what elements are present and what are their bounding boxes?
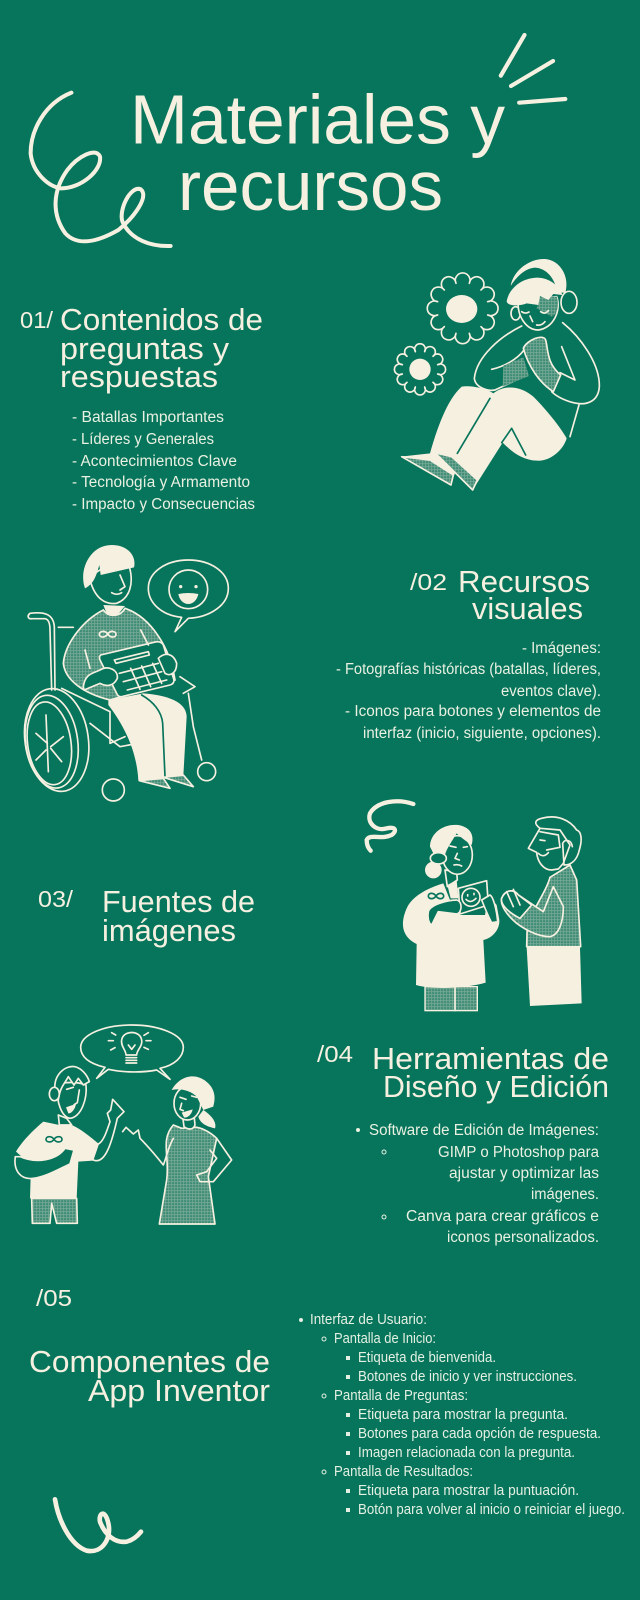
section 04 list: Canva para crear gráficos e (406, 1208, 599, 1225)
man shirt (527, 865, 581, 947)
section 02 list: - Fotografías históricas (batallas, líderes, (336, 661, 601, 678)
section 04 number: /04 (317, 1041, 353, 1067)
decoration: bottom squiggle (55, 1499, 141, 1551)
section 02 list (336, 640, 601, 742)
section 01 list (72, 409, 255, 513)
section 01 number: 01/ (20, 307, 54, 333)
man head (49, 1066, 89, 1125)
section 01 list: - Impacto y Consecuencias (72, 496, 255, 513)
man lower body (527, 947, 582, 1006)
man head (528, 817, 581, 870)
section 04 list: iconos personalizados. (447, 1229, 599, 1246)
section 04 list (356, 1122, 599, 1246)
man trousers (32, 1198, 77, 1223)
section 01 list: - Acontecimientos Clave (72, 453, 237, 470)
section 01 list: - Batallas Importantes (72, 409, 224, 426)
woman scarf (447, 880, 458, 898)
man arm and hands (501, 887, 563, 937)
section 04 list: imágenes. (531, 1186, 599, 1203)
person sweater (63, 608, 175, 700)
woman head (172, 1076, 215, 1129)
person legs (401, 386, 567, 490)
section 01 list: - Tecnología y Armamento (72, 474, 250, 491)
illustration: person with headphones and flowers (394, 259, 599, 490)
tablet (99, 642, 174, 697)
section 05 heading: Componentes de (29, 1344, 270, 1379)
person torso and arms (474, 323, 599, 437)
section 02 list: - Iconos para botones y elementos de (345, 703, 601, 720)
trouser lines (142, 695, 165, 777)
woman dress (159, 1125, 217, 1224)
section 02 list: - Imágenes: (522, 640, 601, 657)
section 04 list: Software de Edición de Imágenes: (369, 1122, 599, 1139)
section 02 number: /02 (410, 569, 447, 595)
wheelchair large wheel (18, 684, 95, 796)
speech bubble with light bulb (81, 1025, 183, 1079)
wheelchair frame (28, 613, 202, 760)
section 05 nested list: Etiqueta de bienvenida. (358, 1350, 496, 1366)
section 02 heading (458, 564, 590, 626)
woman arms and hands (428, 895, 498, 925)
man arms (15, 1099, 124, 1179)
man shirt (16, 1122, 99, 1198)
person shoes (139, 775, 193, 788)
person head (507, 259, 577, 330)
hands (83, 630, 177, 690)
section 03 heading (102, 884, 255, 948)
section 05 nested list: Etiqueta para mostrar la pregunta. (358, 1407, 568, 1423)
section 05 nested list: Botones para cada opción de respuesta. (358, 1426, 601, 1442)
section 03 heading: imágenes (102, 913, 236, 948)
section 02 heading: visuales (472, 591, 583, 626)
decoration: squiggle near section 03 (367, 801, 413, 851)
icon: infinity on sweater (99, 631, 116, 637)
section 04 list: ajustar y optimizar las (449, 1165, 599, 1182)
leg lines (457, 398, 526, 455)
section 05 nested list: Etiqueta para mostrar la puntuación. (358, 1483, 579, 1499)
section 03 heading: Fuentes de (102, 884, 255, 919)
illustration: man and woman with idea bubble (15, 1025, 232, 1224)
section 05 nested list: Botones de inicio y ver instrucciones. (358, 1369, 577, 1385)
section 01 heading: respuestas (60, 359, 218, 394)
wheelchair small wheels (102, 763, 216, 801)
speech bubble with smiley (148, 560, 228, 632)
section 05 nested list: Pantalla de Preguntas: (334, 1388, 468, 1404)
icon: small flower (394, 344, 446, 395)
section 05 nested list: Pantalla de Inicio: (334, 1331, 436, 1347)
section 01 heading (60, 302, 263, 394)
section 03 number: 03/ (38, 886, 74, 912)
woman trousers (425, 987, 477, 1011)
section 05 heading: App Inventor (88, 1373, 270, 1408)
section 01 list: - Líderes y Generales (72, 431, 214, 448)
icon: infinity on woman (428, 893, 444, 899)
tablet with smile (458, 881, 488, 914)
title: recursos (178, 147, 443, 225)
woman arms (123, 1127, 232, 1182)
section 04 heading (372, 1041, 609, 1104)
decoration: title rays (501, 35, 565, 103)
section 02 heading: Recursos (458, 564, 590, 599)
section 04 list: GIMP o Photoshop para (438, 1144, 599, 1161)
section 05 nested list (299, 1312, 625, 1518)
section 05 nested list: Pantalla de Resultados: (334, 1464, 473, 1480)
section 02 list: interfaz (inicio, siguiente, opciones). (363, 725, 601, 742)
woman head (425, 825, 473, 887)
person head (83, 545, 134, 616)
section 05 heading (29, 1344, 270, 1408)
illustration: person in wheelchair with tablet (18, 545, 228, 801)
icon: large flower (427, 273, 498, 344)
section 04 heading: Diseño y Edición (383, 1069, 609, 1104)
title (130, 80, 505, 225)
person shoes (402, 453, 477, 490)
decoration: title squiggle (31, 93, 171, 246)
section 05 nested list: Imagen relacionada con la pregunta. (358, 1445, 575, 1461)
illustration: woman with tablet and man (403, 817, 582, 1011)
section 05 number: /05 (36, 1285, 72, 1311)
icon: infinity on shirt (46, 1137, 62, 1142)
section 01 heading: preguntas y (60, 331, 230, 366)
section 05 nested list: Interfaz de Usuario: (310, 1312, 427, 1328)
person trousers (108, 693, 187, 781)
woman body (403, 883, 499, 988)
section 01 heading: Contenidos de (60, 302, 263, 337)
section 02 list: eventos clave). (501, 683, 601, 700)
title: Materiales y (130, 80, 505, 158)
section 04 heading: Herramientas de (372, 1041, 609, 1076)
